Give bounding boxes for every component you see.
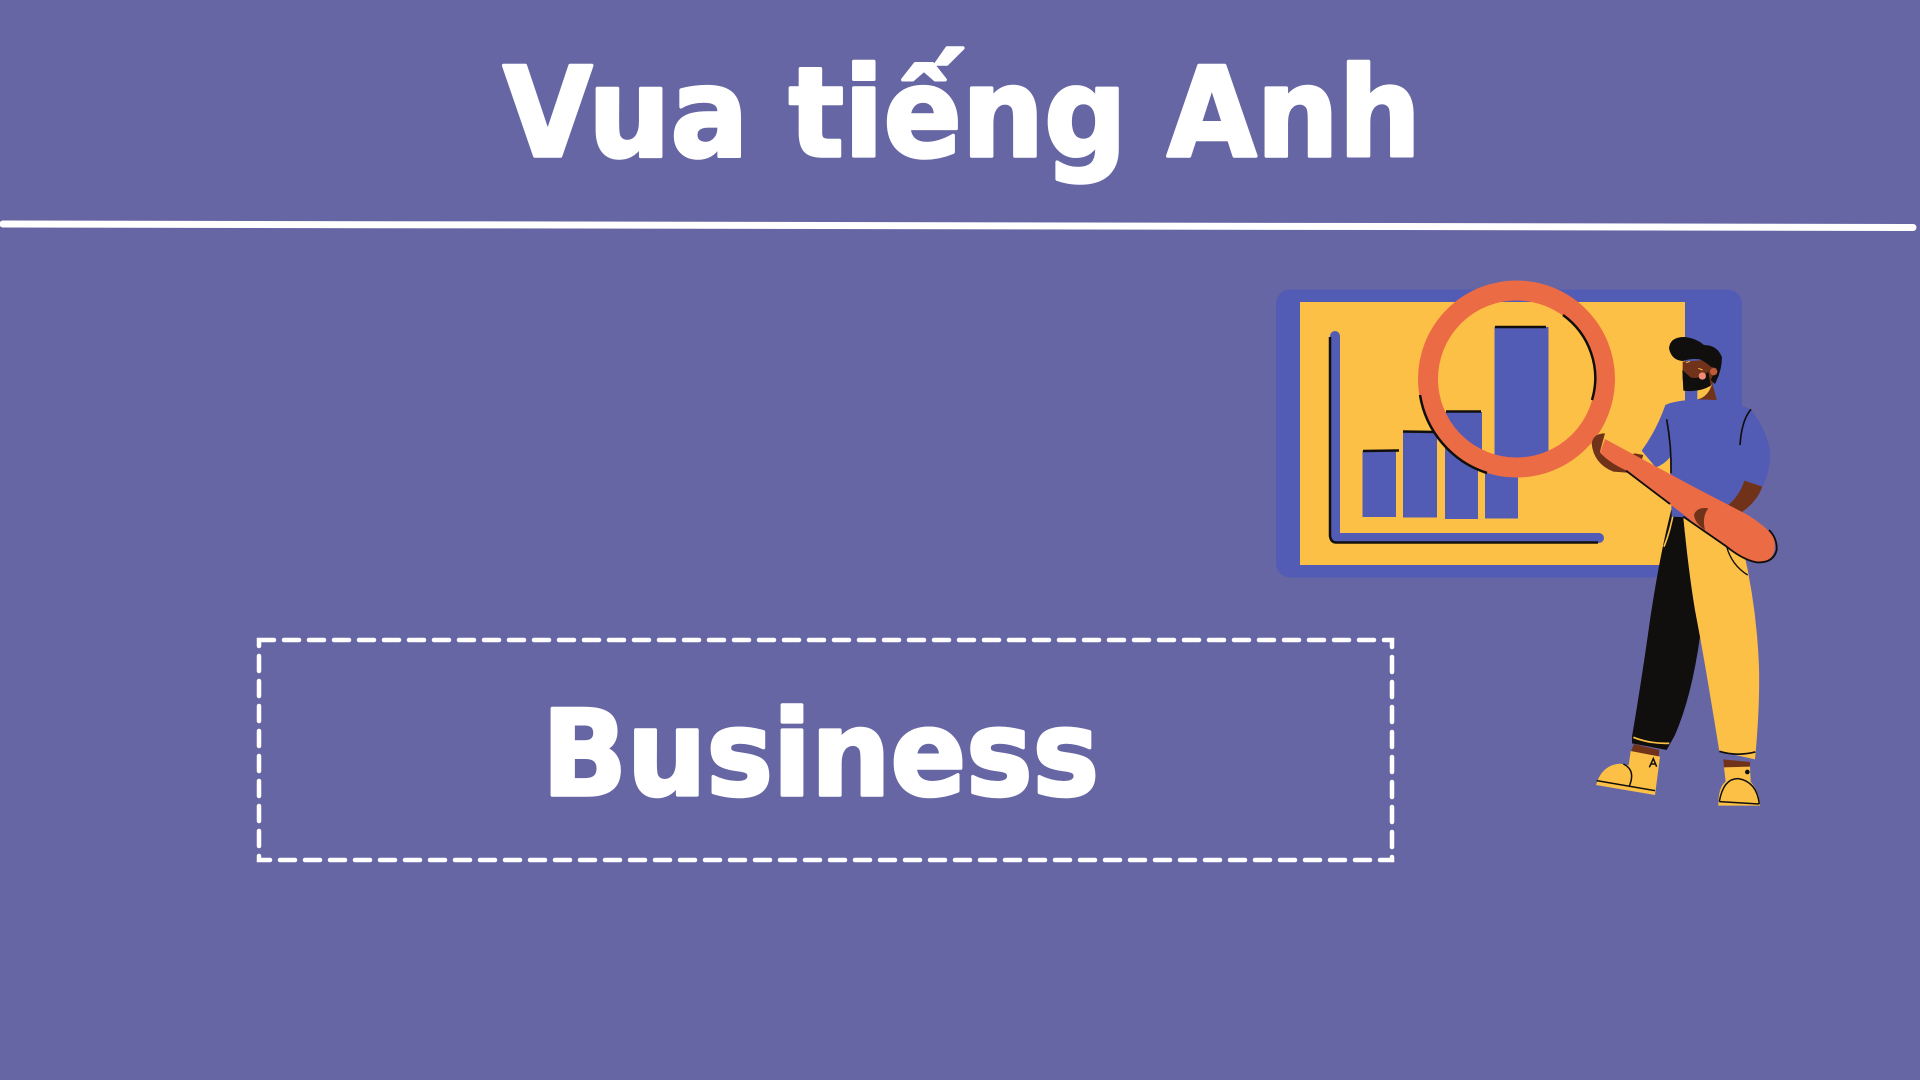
icon: magnifier ring (1420, 290, 1605, 473)
bar chart (1330, 327, 1599, 543)
blue t-shirt (1642, 399, 1770, 520)
right forearm (1728, 481, 1762, 513)
black trouser leg (1632, 508, 1700, 750)
ankles (1631, 744, 1750, 768)
title: Vua tiếng Anh (503, 42, 1421, 186)
dashed label box (259, 640, 1392, 860)
chart board (1276, 290, 1742, 578)
yellow trouser leg (1683, 517, 1759, 759)
chart axes (1330, 336, 1599, 543)
head (1669, 337, 1722, 391)
magnifier handle (1600, 439, 1777, 562)
left hand (1592, 433, 1643, 473)
neck (1697, 382, 1717, 404)
figure: man holding magnifier (1592, 337, 1777, 806)
left shoe (1596, 751, 1660, 795)
illustration: chart board with magnifier and man (1276, 290, 1777, 806)
right shoe (1718, 767, 1760, 806)
label: Business: Business (542, 686, 1099, 824)
